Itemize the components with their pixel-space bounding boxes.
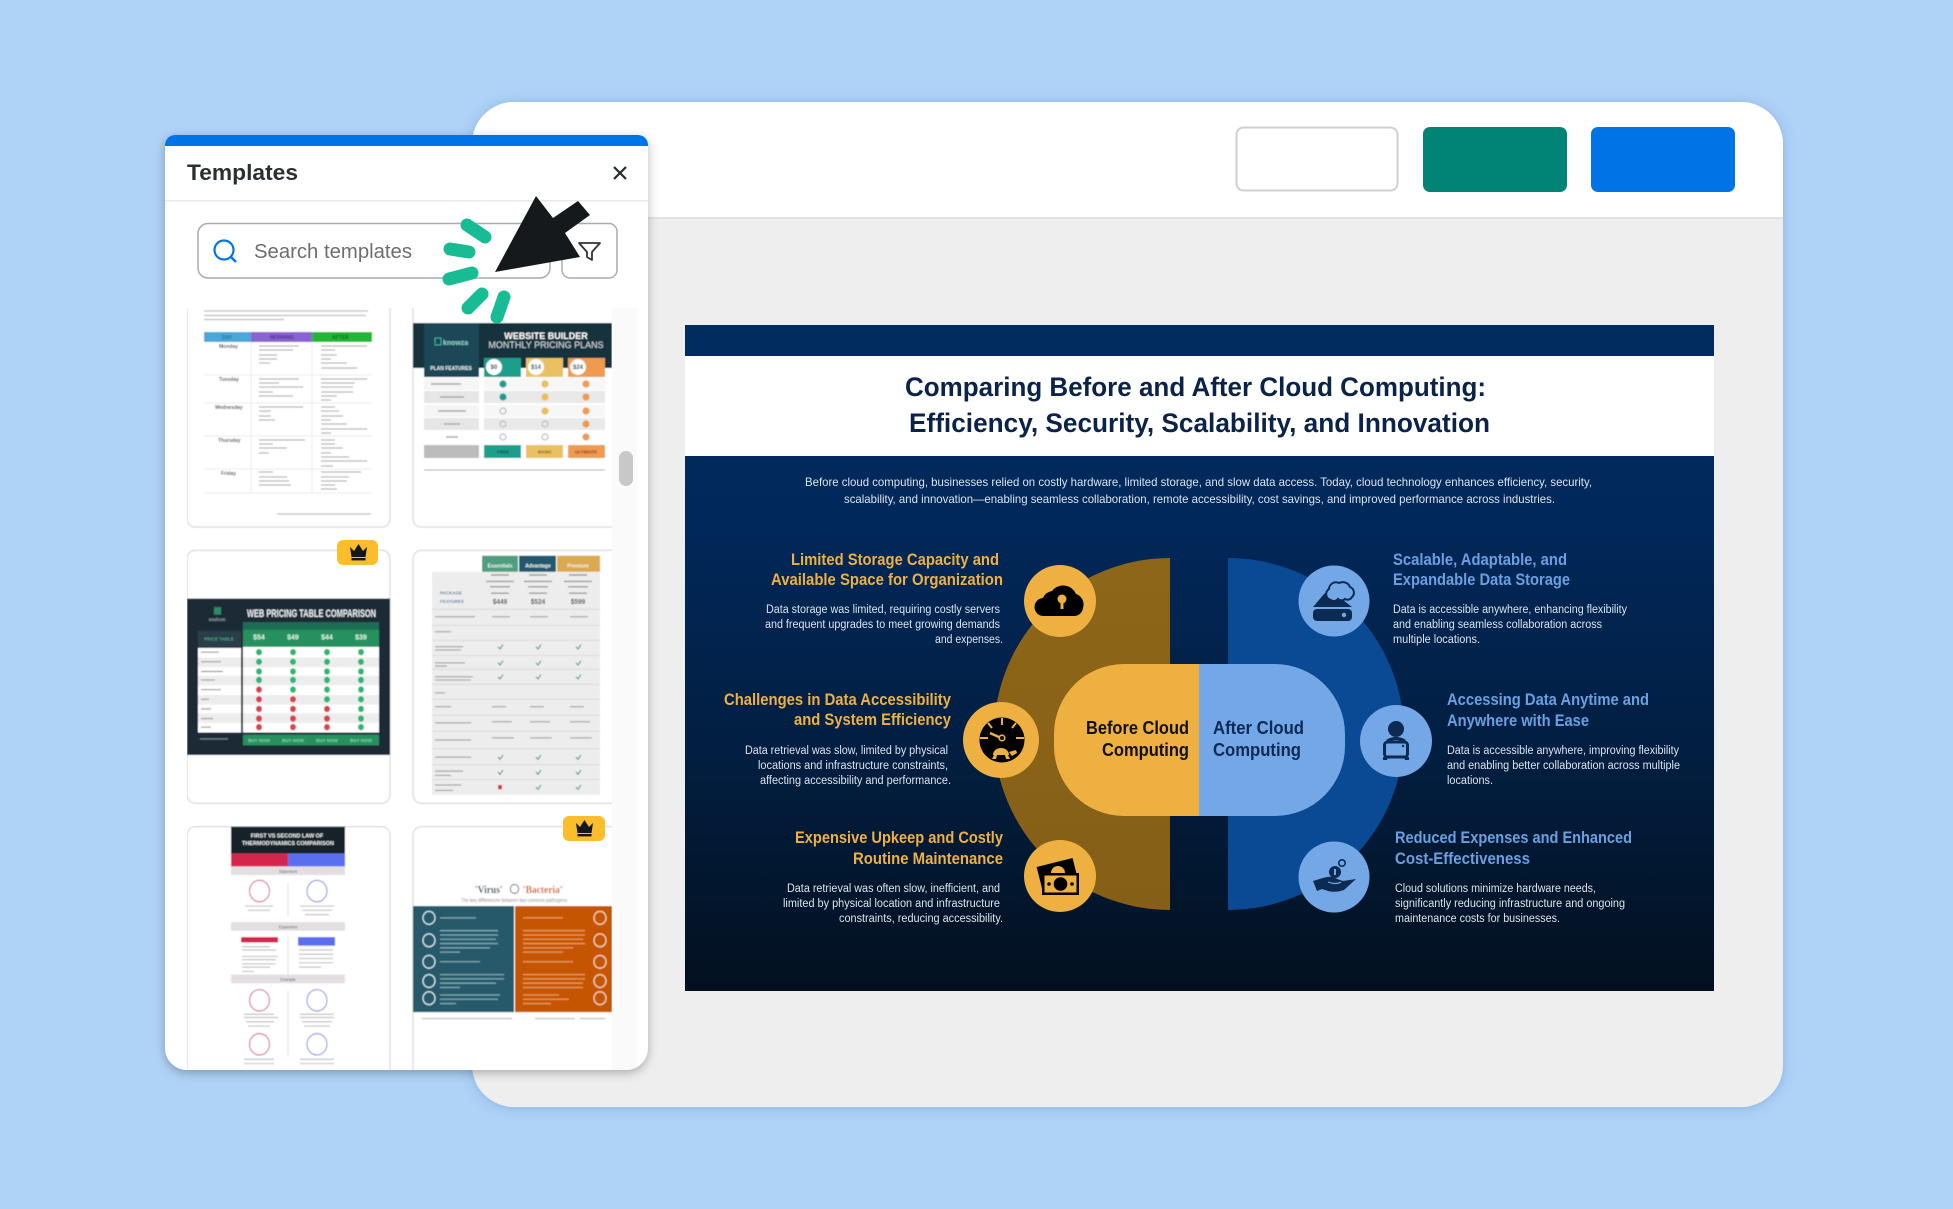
item: limited storage — [765, 551, 1003, 646]
card: website builder pricing — [412, 308, 612, 528]
item: limited storage: Data storage was limited, requiring costly servers — [766, 604, 1000, 616]
card: web pricing table: BUY NOW — [350, 738, 372, 743]
card: web pricing table: BUY NOW — [282, 738, 304, 743]
item: scalable storage: multiple locations. — [1393, 634, 1480, 646]
card: thermodynamics comparison: Expansion — [279, 924, 298, 930]
filter button — [562, 224, 617, 278]
card: weekly timetable: MORNING — [270, 335, 294, 341]
card: website builder pricing: $0 — [491, 365, 498, 371]
icon: money bills — [1024, 840, 1096, 912]
item: limited storage: Available Space for Organization — [771, 571, 1003, 589]
card: virus versus bacteria — [412, 826, 612, 1070]
center pill: after — [1199, 664, 1345, 816]
card: weekly timetable — [187, 290, 390, 527]
item: data accessibility: affecting accessibility and performance. — [760, 775, 951, 787]
before half circle — [994, 558, 1170, 910]
card: thermodynamics comparison: FIRST VS SECOND LAW OF — [251, 833, 324, 840]
badge: premium crown — [337, 540, 378, 565]
card: weekly timetable: Tuesday — [219, 377, 239, 383]
intro text: Before cloud computing, businesses relied on costly hardware, limited storage, and slow data access. Today, cloud technology enhances efficiency, security, — [805, 475, 1592, 489]
icon: hand with coins — [1298, 842, 1370, 912]
card: virus versus bacteria: 'Virus' — [475, 885, 503, 896]
card: web pricing table: PRICE TABLE — [204, 636, 234, 641]
item: reduced expenses: Cloud solutions minimize hardware needs, — [1395, 883, 1596, 895]
center pill: after: After Cloud — [1213, 718, 1304, 738]
item: accessing data: locations. — [1447, 775, 1493, 787]
card: package features table: $449 — [493, 599, 507, 606]
button: outlined — [1236, 128, 1398, 190]
card: website builder pricing: ULTIMATE — [575, 450, 597, 454]
item: data accessibility — [724, 691, 952, 787]
item: expensive upkeep — [783, 829, 1004, 925]
item: scalable storage: Expandable Data Storage — [1393, 571, 1570, 589]
intro text: scalability, and innovation—enabling seamless collaboration, remote accessibility, cost savings, and improved performance across industries. — [844, 492, 1555, 506]
search box: Search templates — [254, 241, 412, 263]
center pill: before: Before Cloud — [1086, 718, 1189, 738]
card: thermodynamics comparison — [187, 826, 391, 1070]
item: limited storage: and expenses. — [935, 634, 1003, 646]
item: scalable storage — [1393, 551, 1627, 646]
item: accessing data: Data is accessible anywhere, improving flexibility — [1447, 745, 1679, 757]
card: web pricing table: smallcom — [209, 617, 226, 622]
card: website builder pricing: FREE — [497, 450, 509, 454]
item: reduced expenses: Cost-Effectiveness — [1395, 850, 1530, 868]
center pill: after: Computing — [1213, 740, 1301, 760]
title band: Efficiency, Security, Scalability, and Innovation — [909, 408, 1490, 438]
card: website builder pricing: BASIC — [538, 450, 553, 454]
title band: Comparing Before and After Cloud Computing: — [905, 372, 1486, 402]
card: weekly timetable: DAY — [222, 335, 233, 341]
item: data accessibility: Challenges in Data Accessibility — [724, 691, 952, 709]
card: web pricing table: BUY NOW — [316, 738, 338, 743]
item: expensive upkeep: Expensive Upkeep and Costly — [795, 829, 1004, 847]
card: package features table: Premium — [567, 563, 589, 570]
card: weekly timetable: Wednesday — [215, 405, 243, 411]
card: thermodynamics comparison: Statement — [279, 869, 298, 874]
card: package features table: $599 — [571, 599, 585, 606]
button: green — [1423, 127, 1567, 192]
intro text — [805, 475, 1592, 506]
card: web pricing table: $44 — [321, 632, 333, 641]
card: package features table: Essentials — [488, 563, 512, 570]
card: website builder pricing: $24 — [573, 365, 584, 371]
card: package features table: Advantage — [525, 563, 551, 570]
icon: person with laptop — [1360, 705, 1432, 777]
card: website builder pricing: $14 — [531, 365, 542, 371]
item: accessing data: Anywhere with Ease — [1447, 712, 1589, 730]
blue top strip — [165, 135, 648, 146]
icon: close — [614, 167, 626, 179]
heading: Templates: Templates — [187, 160, 298, 185]
card: package features table: PACKAGE — [440, 590, 462, 595]
arrow: black cursor — [495, 196, 590, 272]
card: virus versus bacteria: 'Bacteria' — [523, 885, 563, 896]
item: reduced expenses: Reduced Expenses and Enhanced — [1395, 829, 1632, 847]
accent: green burst ticks — [449, 225, 504, 317]
panel: editor window — [472, 102, 1783, 1107]
item: reduced expenses — [1395, 829, 1632, 925]
card: website builder pricing: MONTHLY PRICING PLANS — [488, 340, 604, 350]
item: accessing data: and enabling better collaboration across multiple — [1447, 760, 1680, 772]
panel: templates sidebar — [165, 135, 653, 1105]
card: website builder pricing: WEBSITE BUILDER — [504, 331, 588, 341]
item: data accessibility: Data retrieval was slow, limited by physical — [745, 745, 948, 757]
icon: cloud drive — [1298, 566, 1370, 636]
item: reduced expenses: maintenance costs for businesses. — [1395, 913, 1560, 925]
card: web pricing table: WEB PRICING TABLE COMPARISON — [247, 609, 376, 620]
card: package features table: $524 — [531, 599, 545, 606]
icon: cloud with keyhole — [1024, 565, 1096, 637]
button: blue — [1591, 127, 1735, 192]
center pill: before — [1054, 664, 1199, 816]
card: web pricing table: $39 — [355, 632, 367, 641]
card: website builder pricing: PLAN FEATURES — [430, 366, 472, 372]
item: expensive upkeep: limited by physical location and infrastructure — [783, 898, 1000, 910]
badge: premium crown — [563, 816, 605, 841]
item: limited storage: and frequent upgrades to meet growing demands — [765, 619, 1000, 631]
card: web pricing table — [187, 550, 390, 803]
search box — [198, 224, 550, 278]
card: virus versus bacteria: The key differences between two common pathogens — [461, 898, 567, 904]
card: thermodynamics comparison: THERMODYNAMICS COMPARISON — [242, 841, 334, 847]
card: web pricing table: $49 — [287, 632, 299, 641]
card: weekly timetable: Friday — [221, 471, 236, 477]
card: package features table: FEATURES — [440, 599, 464, 604]
item: scalable storage: Scalable, Adaptable, and — [1393, 551, 1567, 569]
template thumbnails — [187, 308, 612, 1070]
item: data accessibility: and System Efficiency — [794, 711, 952, 729]
card: package features table — [412, 550, 612, 804]
item: expensive upkeep: Data retrieval was often slow, inefficient, and — [787, 883, 1000, 895]
item: reduced expenses: significantly reducing infrastructure and ongoing — [1395, 898, 1625, 910]
card: thermodynamics comparison: Example — [280, 977, 296, 982]
icon: speedometer with turtle — [963, 702, 1039, 778]
card: weekly timetable: Thursday — [218, 438, 241, 444]
center pill: before: Computing — [1102, 740, 1189, 760]
item: expensive upkeep: Routine Maintenance — [853, 850, 1003, 868]
item: data accessibility: locations and infrastructure constraints, — [758, 760, 948, 772]
title band — [685, 356, 1714, 456]
item: scalable storage: Data is accessible anywhere, enhancing flexibility — [1393, 604, 1627, 616]
item: expensive upkeep: constraints, reducing accessibility. — [839, 913, 1003, 925]
scrollbar thumb — [619, 451, 633, 486]
item: accessing data: Accessing Data Anytime and — [1447, 691, 1649, 709]
item: scalable storage: and enabling seamless collaboration across — [1393, 619, 1602, 631]
scrollbar track — [612, 308, 637, 1070]
card: web pricing table: $54 — [253, 632, 265, 641]
card: website builder pricing: knowza — [443, 340, 468, 347]
card: weekly timetable: AFTER — [332, 335, 349, 341]
after half circle — [1228, 558, 1404, 910]
card: web pricing table: BUY NOW — [248, 738, 270, 743]
item: accessing data — [1447, 691, 1680, 787]
card: weekly timetable: Monday — [219, 344, 238, 350]
item: limited storage: Limited Storage Capacity and — [791, 551, 999, 569]
infographic poster — [685, 325, 1714, 991]
